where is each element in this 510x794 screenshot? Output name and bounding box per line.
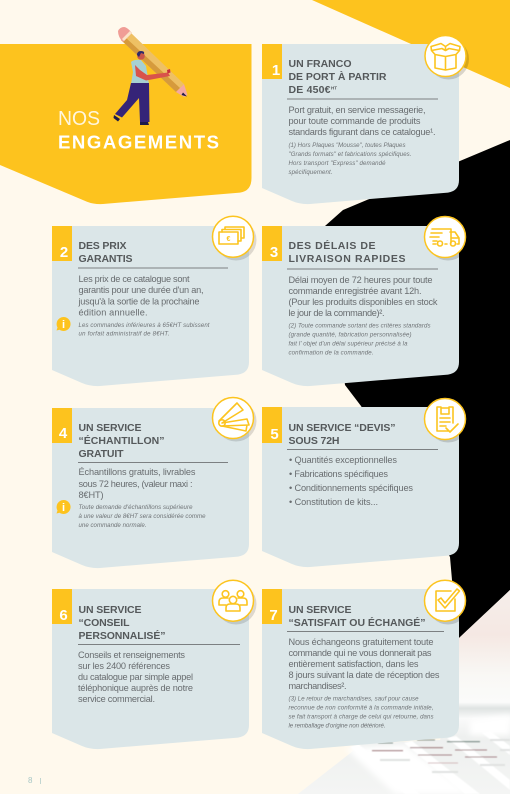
body text: Les prix de ce catalogue sont — [78, 274, 190, 284]
icon: banknotes — [212, 216, 256, 260]
panel: 3 délais de livraison — [262, 216, 468, 386]
heading: UN SERVICE — [288, 604, 352, 616]
heading: DES DÉLAIS DE — [288, 239, 376, 252]
number badge 6: 6 — [59, 607, 68, 624]
body text: service commercial. — [78, 694, 155, 704]
heading: PERSONNALISÉ” — [78, 629, 166, 642]
body text: Port gratuit, en service messagerie, — [288, 105, 426, 115]
footnote: spécifiquement. — [288, 169, 332, 176]
body text: le jour de la commande)². — [288, 308, 384, 318]
note: un forfait administratif de 8€HT. — [78, 330, 170, 338]
footnote — [288, 696, 434, 730]
heading: DES PRIX — [78, 240, 126, 252]
body text: 8 jours suivant la date de réception des — [288, 670, 440, 680]
heading: DE PORT À PARTIR — [288, 70, 387, 83]
heading — [288, 604, 426, 629]
illustration: man carrying a pencil — [114, 27, 188, 125]
number badge 6 — [52, 589, 72, 624]
note: à une valeur de 8€HT sera considérée comme — [78, 513, 206, 520]
number badge 4: 4 — [59, 425, 68, 442]
body text: entièrement satisfaction, dans les — [288, 659, 419, 669]
number badge 7: 7 — [269, 607, 278, 624]
body text: commande enregistrée avant 12h. — [288, 286, 422, 296]
heading — [78, 422, 164, 460]
body text: 8€HT) — [78, 490, 104, 500]
icon: clipboard check — [424, 398, 468, 442]
heading — [288, 422, 396, 447]
number badge 1 — [262, 44, 282, 79]
footnote: (2) Toute commande sortant des critères standards — [288, 323, 430, 330]
heading: “ÉCHANTILLON” — [78, 434, 164, 447]
note — [78, 322, 210, 338]
panel: 2 prix garantis — [52, 216, 256, 386]
body text — [78, 467, 196, 500]
footnote: confirmation de la commande. — [288, 350, 374, 357]
body text: Nous échangeons gratuitement toute — [288, 637, 434, 647]
footnote: (1) Hors Plaques "Mousse", toutes Plaques — [288, 142, 406, 149]
body text — [288, 105, 436, 137]
footnote: se fait transport à charge de celui qui retourne, dans — [288, 714, 434, 721]
heading — [288, 58, 387, 96]
heading: UN FRANCO — [288, 58, 352, 70]
footnote: reconnue de non conformité à la commande initiale, — [288, 705, 434, 712]
footnote: "Grands formats" et fabrications spécifiques. — [288, 151, 412, 158]
heading: UN SERVICE “DEVIS” — [288, 422, 396, 434]
panel: 5 service devis — [262, 398, 468, 567]
icon: info: i — [62, 502, 65, 514]
body text: garantis pour une durée d'un an, — [78, 285, 204, 295]
footnote: le remballage d'origine non détérioré. — [288, 723, 386, 730]
heading: HT — [331, 86, 337, 90]
bullet list: • Conditionnements spécifiques — [289, 483, 413, 493]
heading: LIVRAISON RAPIDES — [288, 253, 406, 265]
heading — [288, 239, 406, 265]
note: Toute demande d'échantillons supérieure — [78, 504, 193, 511]
footnote: (3) Le retour de marchandises, sauf pour cause — [288, 696, 419, 703]
panel: 7 satisfait ou échangé — [262, 580, 468, 749]
heading: UN SERVICE — [78, 604, 142, 616]
number badge 2 — [52, 226, 72, 261]
note — [78, 504, 206, 529]
body text: Délai moyen de 72 heures pour toute — [288, 275, 432, 285]
body text: standards figurant dans ce catalogue¹. — [288, 127, 436, 137]
body text: pour toute commande de produits — [288, 116, 421, 126]
icon: info — [56, 317, 71, 331]
footnote: (grande quantité, fabrication personnalisée) — [288, 332, 412, 339]
number badge 4 — [52, 408, 72, 443]
body text: (Pour les produits disponibles en stock — [288, 297, 438, 307]
number badge 5: 5 — [270, 426, 279, 443]
icon: box — [425, 36, 469, 80]
body text — [78, 274, 204, 318]
icon: info: i — [62, 319, 65, 331]
panel: title banner — [0, 27, 252, 204]
body text: jusqu'à la sortie de la prochaine — [78, 296, 200, 306]
decorative black shape — [325, 140, 510, 638]
heading: GARANTIS — [78, 253, 132, 265]
bullet list: • Quantités exceptionnelles — [289, 455, 397, 465]
icon: info — [56, 500, 71, 514]
title: NOS — [58, 107, 100, 130]
body text: commande qui ne vous donnerait pas — [288, 648, 432, 658]
footnote — [288, 142, 412, 176]
body text: marchandises². — [288, 681, 346, 691]
body text — [78, 650, 193, 704]
title: ENGAGEMENTS — [58, 132, 219, 152]
body text: Échantillons gratuits, livrables — [78, 467, 196, 477]
note: Les commandes inférieures à 65€HT subissent — [78, 322, 210, 329]
body text: sous 72 heures, (valeur maxi : — [78, 479, 192, 489]
icon: delivery truck — [424, 216, 468, 260]
heading — [78, 604, 166, 642]
keyboard photo — [298, 590, 510, 794]
heading: DE 450€ — [288, 84, 331, 96]
number badge 3: 3 — [270, 244, 278, 261]
number badge 5 — [262, 407, 282, 443]
bullet list — [289, 455, 413, 507]
icon: colour swatches — [212, 398, 256, 442]
footnote: fait l' objet d'un délai supérieur précisé à la — [288, 341, 408, 348]
bullet list: • Constitution de kits... — [289, 497, 378, 507]
heading: “CONSEIL — [78, 617, 130, 629]
heading: “SATISFAIT OU ÉCHANGÉ” — [288, 616, 426, 629]
panel: 1 franco de port — [262, 36, 469, 204]
panel: 6 conseil personnalisé — [52, 580, 256, 749]
icon: checked box — [424, 580, 468, 624]
heading: GRATUIT — [78, 448, 124, 460]
number badge 3 — [262, 226, 282, 261]
footnote: Hors transport "Express" demandé — [288, 160, 386, 167]
page number: 8 — [28, 776, 33, 785]
icon: team — [212, 580, 256, 624]
page number — [28, 776, 41, 785]
number badge 7 — [262, 589, 282, 624]
decorative yellow triangle — [312, 0, 510, 88]
body text: Conseils et renseignements — [78, 650, 185, 660]
number badge 1: 1 — [272, 62, 280, 79]
body text — [288, 637, 440, 691]
heading: SOUS 72H — [288, 435, 340, 447]
icon: banknotes: € — [227, 236, 231, 243]
body text: téléphonique auprès de notre — [78, 683, 193, 693]
body text: sur les 2400 références — [78, 661, 170, 671]
title — [58, 107, 219, 152]
bullet list: • Fabrications spécifiques — [289, 469, 388, 479]
panel: 4 service échantillon — [52, 398, 256, 568]
heading: UN SERVICE — [78, 422, 142, 434]
body text — [288, 275, 438, 318]
body text: édition annuelle. — [78, 308, 148, 318]
number badge 2: 2 — [60, 244, 68, 261]
note: une commande normale. — [78, 522, 146, 529]
heading — [78, 240, 132, 265]
body text: du catalogue par simple appel — [78, 672, 193, 682]
footnote — [288, 323, 430, 357]
